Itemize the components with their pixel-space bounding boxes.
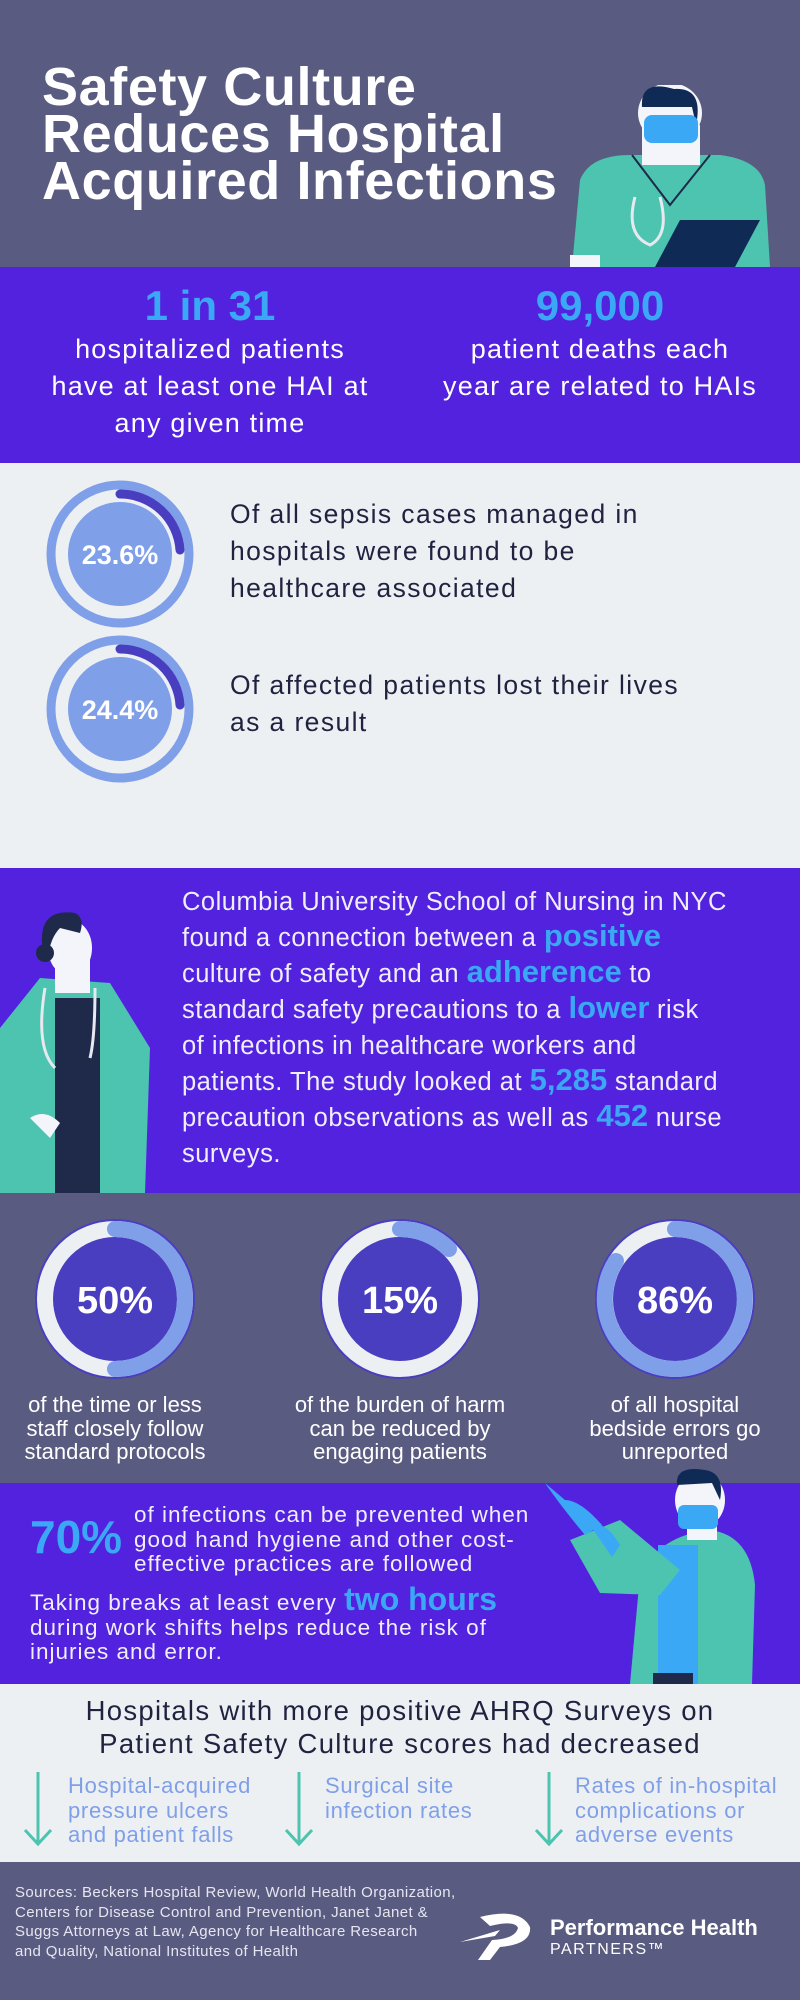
text: sepsis cases: Of all sepsis cases managed in bbox=[230, 499, 639, 529]
stat: 70%: 70% bbox=[30, 1511, 122, 1563]
title: Acquired Infections bbox=[42, 151, 557, 211]
stat: 1 in 31: have at least one HAI at bbox=[52, 371, 368, 401]
donut: 23.6%: 23.6% bbox=[82, 540, 158, 570]
sources text bbox=[15, 1884, 456, 1960]
text: breaks: two hours bbox=[344, 1581, 497, 1617]
text: sepsis cases: hospitals were found to be bbox=[230, 536, 576, 566]
text: lost lives bbox=[230, 670, 679, 737]
brand name: Performance Health bbox=[550, 1915, 758, 1940]
illustration: nurse with clipboard bbox=[570, 85, 770, 267]
donut: 24.4%: 24.4% bbox=[82, 695, 158, 725]
sources text: Suggs Attorneys at Law, Agency for Healthcare Research bbox=[15, 1923, 418, 1940]
heading bbox=[86, 1695, 714, 1759]
text block: study findings: standard safety precautions to a risk bbox=[182, 996, 699, 1024]
sources text: Centers for Disease Control and Prevention, Janet Janet & bbox=[15, 1904, 428, 1921]
arrow: down 2 bbox=[285, 1772, 313, 1846]
text: sepsis cases bbox=[230, 499, 639, 603]
text: surgical site: Surgical site bbox=[325, 1773, 454, 1798]
text block: study findings: precaution observations as well as nurse bbox=[182, 1104, 722, 1132]
arrow: down 3 bbox=[535, 1772, 563, 1846]
text: breaks: during work shifts helps reduce the risk of bbox=[30, 1614, 487, 1640]
text block: study findings bbox=[182, 888, 727, 1168]
donut: 86%: 86% bbox=[637, 1280, 713, 1322]
text block: study findings: of infections in healthcare workers and bbox=[182, 1032, 637, 1060]
icon: logo mark bbox=[460, 1914, 530, 1960]
text block: study findings: Columbia University School of Nursing in NYC bbox=[182, 888, 727, 916]
title bbox=[42, 57, 557, 211]
heading: Hospitals with more positive AHRQ Surveys on bbox=[86, 1695, 714, 1726]
header panel bbox=[0, 0, 800, 267]
text: complications bbox=[575, 1773, 777, 1847]
text block: study findings: surveys. bbox=[182, 1140, 281, 1168]
donut: 86%: of all hospital bbox=[611, 1392, 739, 1417]
text block: study findings: found a connection between a bbox=[182, 924, 536, 952]
panel: Columbia study bbox=[0, 868, 800, 1193]
illustration: doctor with gloves bbox=[545, 1469, 755, 1684]
text: breaks: injuries and error. bbox=[30, 1639, 223, 1664]
illustration: nurse woman bbox=[0, 912, 150, 1193]
heading: Patient Safety Culture scores had decreased bbox=[99, 1728, 701, 1759]
text: pressure ulcers: and patient falls bbox=[68, 1822, 234, 1847]
panel: AHRQ results bbox=[0, 1684, 800, 1862]
text: complications: complications or bbox=[575, 1798, 745, 1822]
text block: study findings: 5,285 bbox=[530, 1062, 607, 1097]
brand name: PARTNERS™ bbox=[550, 1941, 665, 1958]
arrow: down 1 bbox=[24, 1772, 52, 1846]
text: infections prevented: good hand hygiene and other cost- bbox=[134, 1526, 515, 1552]
sources text: Sources: Beckers Hospital Review, World Health Organization, bbox=[15, 1884, 456, 1901]
text block: study findings: culture of safety and an to bbox=[182, 960, 652, 988]
donut: 50%: staff closely follow bbox=[27, 1416, 203, 1440]
text: infections prevented: of infections can be prevented when bbox=[134, 1502, 529, 1527]
text block: study findings: lower bbox=[568, 990, 649, 1025]
stat: 99,000: year are related to HAIs bbox=[443, 371, 757, 401]
text: complications: Rates of in-hospital bbox=[575, 1773, 777, 1798]
donut: 15%: can be reduced by bbox=[309, 1416, 491, 1440]
stat: 1 in 31: any given time bbox=[115, 408, 305, 438]
donut: 86%: bedside errors go bbox=[589, 1416, 761, 1440]
text block: study findings: adherence bbox=[467, 954, 622, 989]
text: surgical site: infection rates bbox=[325, 1798, 472, 1822]
text: breaks: Taking breaks at least every bbox=[30, 1590, 337, 1615]
donut: 15%: of the burden of harm bbox=[295, 1392, 505, 1417]
text: complications: adverse events bbox=[575, 1822, 734, 1847]
text: sepsis cases: healthcare associated bbox=[230, 573, 517, 603]
donut: 86% bbox=[589, 1219, 761, 1464]
sources text: and Quality, National Institutes of Health bbox=[15, 1943, 298, 1960]
stat: 1 in 31: hospitalized patients bbox=[75, 334, 345, 364]
panel: hand hygiene bbox=[0, 1483, 800, 1684]
donut: 50%: standard protocols bbox=[24, 1439, 206, 1464]
stat: 1 in 31: 1 in 31 bbox=[145, 282, 275, 329]
donut: 24.4% bbox=[46, 636, 194, 782]
text: breaks bbox=[30, 1581, 497, 1664]
stats panel bbox=[0, 267, 800, 463]
stat: 99,000: patient deaths each bbox=[471, 334, 729, 364]
donut: 15%: 15% bbox=[362, 1280, 438, 1322]
text: pressure ulcers bbox=[68, 1773, 251, 1847]
donut: 23.6% bbox=[46, 480, 194, 628]
donut: 50%: of the time or less bbox=[28, 1392, 202, 1417]
title: Safety Culture bbox=[42, 57, 416, 117]
donut: 50% bbox=[24, 1219, 206, 1464]
text: surgical site bbox=[325, 1773, 472, 1822]
text: lost lives: Of affected patients lost their lives bbox=[230, 670, 679, 700]
text: pressure ulcers: pressure ulcers bbox=[68, 1798, 229, 1822]
text: lost lives: as a result bbox=[230, 707, 368, 737]
donut: 15% bbox=[295, 1219, 505, 1464]
title: Reduces Hospital bbox=[42, 104, 505, 164]
text block: study findings: 452 bbox=[596, 1098, 648, 1133]
text: pressure ulcers: Hospital-acquired bbox=[68, 1773, 251, 1798]
donut: 50%: 50% bbox=[77, 1280, 153, 1322]
stat: 1 in 31 bbox=[52, 282, 368, 438]
panel: sepsis bbox=[0, 463, 800, 868]
donut: 15%: engaging patients bbox=[313, 1439, 487, 1464]
panel: protocol stats bbox=[0, 1193, 800, 1483]
text block: study findings: patients. The study looked at standard bbox=[182, 1068, 718, 1096]
stat: 99,000 bbox=[443, 282, 757, 401]
brand name bbox=[550, 1915, 758, 1958]
stat: 99,000: 99,000 bbox=[536, 282, 664, 329]
text block: study findings: positive bbox=[544, 918, 661, 953]
donut: 86%: unreported bbox=[622, 1439, 728, 1464]
footer bbox=[0, 1862, 800, 2000]
text: infections prevented: effective practices are followed bbox=[134, 1551, 473, 1576]
text: infections prevented bbox=[134, 1502, 529, 1576]
